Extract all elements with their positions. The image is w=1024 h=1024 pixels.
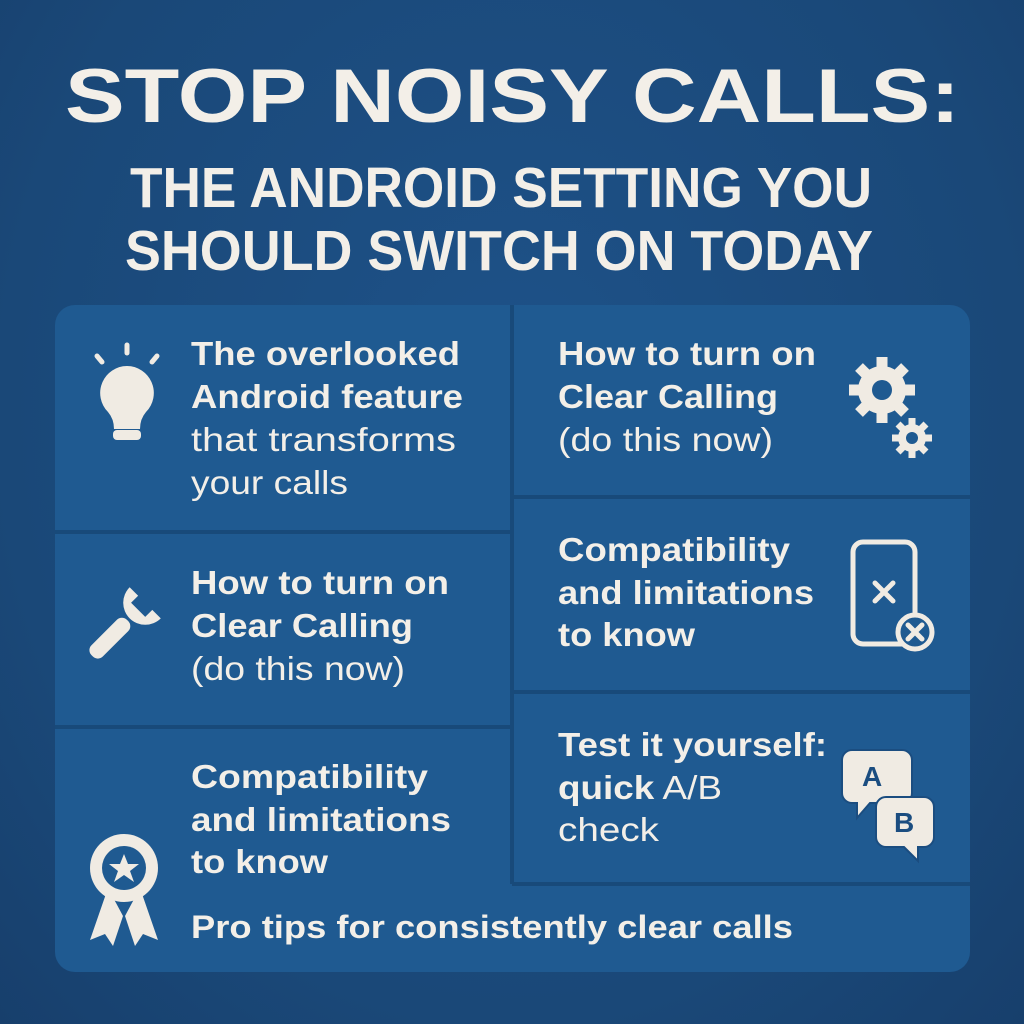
icon: A/B speech bubbles: B — [894, 807, 914, 838]
icon: light bulb — [97, 345, 157, 440]
panel: overlooked feature — [97, 335, 463, 501]
panel: compatibility (right) — [558, 531, 932, 653]
panel: how to turn on (left) — [77, 564, 449, 687]
title: STOP NOISY CALLS: — [65, 54, 960, 139]
icon: award badge — [90, 834, 158, 946]
panel: how to turn on (right): (do this now) — [558, 421, 773, 458]
panel: compatibility (left) — [90, 758, 451, 946]
icon: wrench — [77, 587, 161, 671]
panel: how to turn on (right) — [558, 335, 932, 458]
panel: compatibility (right): to know — [558, 616, 695, 653]
subtitle — [125, 156, 873, 283]
pro tips text: Pro tips for consistently clear calls — [191, 909, 793, 945]
panel: how to turn on (left): Clear Calling — [191, 607, 413, 644]
icon: A/B speech bubbles: A — [862, 761, 882, 792]
panel: compatibility (right): and limitations — [558, 574, 814, 611]
panel: compatibility (left): to know — [191, 843, 328, 880]
panel: how to turn on (left): How to turn on — [191, 564, 449, 601]
icon: phone with x — [853, 542, 932, 649]
panel: overlooked feature: your calls — [191, 464, 348, 501]
panel: overlooked feature: Android feature — [191, 378, 463, 415]
title — [65, 54, 960, 283]
panel: test it yourself — [558, 726, 934, 861]
panel: test it yourself: check — [558, 811, 660, 848]
panel: overlooked feature: that transforms — [191, 421, 456, 458]
panel: test it yourself: Test it yourself: — [558, 726, 827, 763]
panel: test it yourself: quick A/B — [558, 769, 722, 806]
panel: compatibility (right): Compatibility — [558, 531, 791, 568]
panel: compatibility (left): and limitations — [191, 801, 451, 838]
icon: A/B speech bubbles — [842, 750, 934, 861]
subtitle: SHOULD SWITCH ON TODAY — [125, 219, 873, 283]
panel: how to turn on (right): How to turn on — [558, 335, 816, 372]
panel container — [55, 305, 970, 972]
subtitle: THE ANDROID SETTING YOU — [130, 156, 872, 220]
panel: overlooked feature: The overlooked — [191, 335, 460, 372]
panel: how to turn on (right): Clear Calling — [558, 378, 778, 415]
icon: gears — [849, 357, 932, 458]
panel: compatibility (left): Compatibility — [191, 758, 429, 795]
panel: how to turn on (left): (do this now) — [191, 650, 405, 687]
